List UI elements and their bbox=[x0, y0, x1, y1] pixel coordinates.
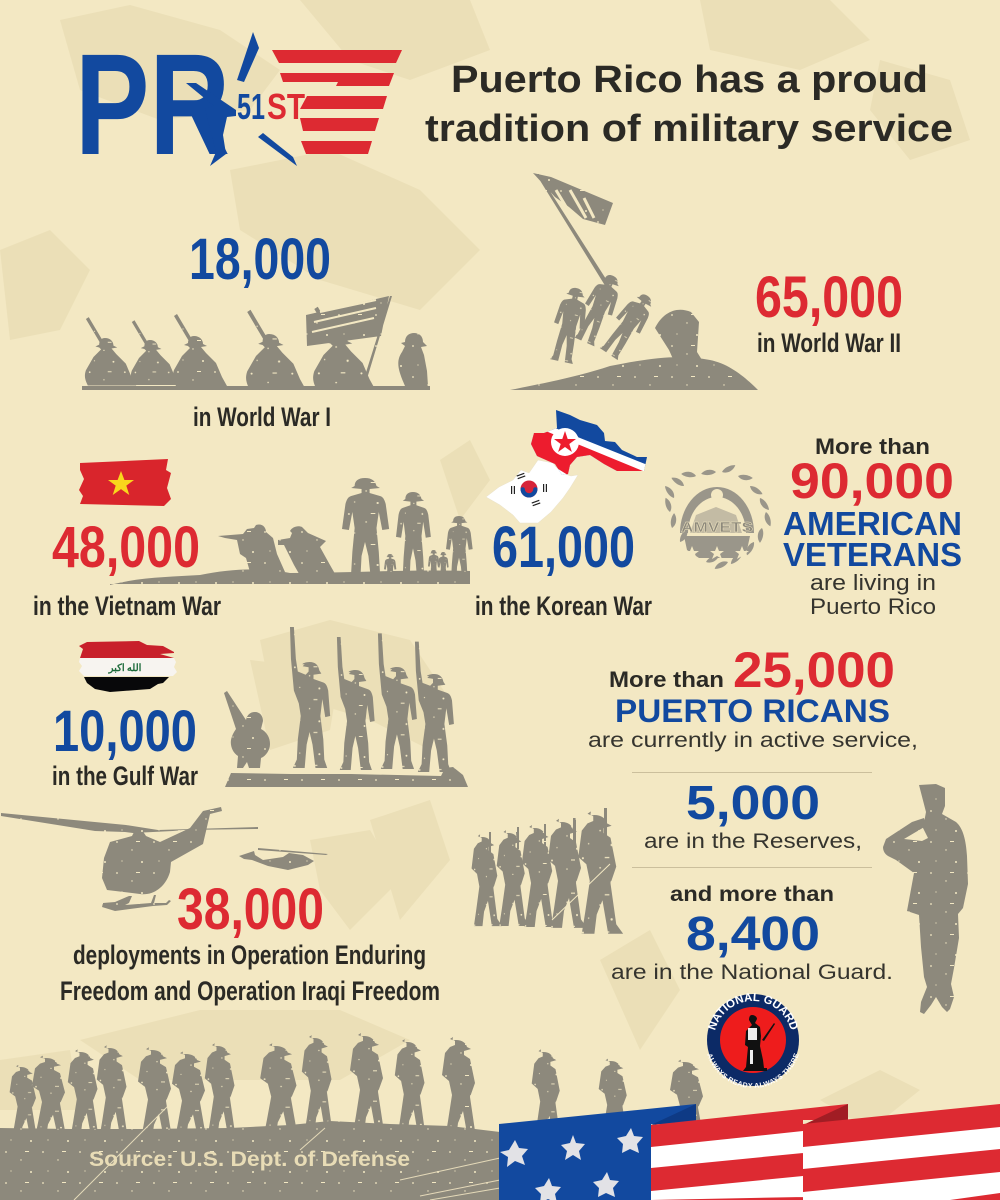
stat: Korean War bbox=[475, 515, 652, 621]
stat: Korean War: 61,000 bbox=[492, 515, 635, 580]
icon: National Guard seal: NATIONAL GUARD bbox=[708, 993, 798, 1030]
stat: 90,000 American veterans: AMERICAN bbox=[783, 505, 962, 542]
stat: 25,000 Puerto Ricans in active service: are currently in active service, bbox=[588, 729, 918, 752]
stat: 8,400 National Guard: and more than bbox=[670, 883, 834, 906]
icon: AMVETS seal: AMVETS bbox=[681, 519, 753, 536]
illustration: WWI soldiers and flag bbox=[82, 296, 430, 390]
stat: Vietnam War bbox=[33, 515, 221, 621]
stat: Vietnam War: in the Vietnam War bbox=[33, 591, 221, 621]
illustration: helicopters bbox=[1, 807, 328, 911]
stat: 90,000 American veterans: VETERANS bbox=[783, 536, 962, 573]
title: Puerto Rico has a proud bbox=[451, 59, 928, 101]
logo: PR 51st: PR bbox=[75, 24, 230, 185]
illustration: flag raising bbox=[510, 173, 758, 390]
stat: 38,000 deployments: deployments in Operation Enduring bbox=[73, 940, 426, 970]
stat: Vietnam War: 48,000 bbox=[52, 515, 200, 580]
icon: National Guard seal bbox=[707, 993, 799, 1088]
icon: National Guard seal: ALWAYS READY ALWAYS THERE bbox=[707, 1053, 799, 1088]
stat: 25,000 Puerto Ricans in active service: 25,000 bbox=[733, 642, 895, 698]
source note: Source: U.S. Dept. of Defense bbox=[89, 1148, 410, 1171]
stat: 90,000 American veterans: are living in bbox=[810, 570, 936, 595]
stat: 38,000 deployments: Freedom and Operation Iraqi Freedom bbox=[60, 976, 440, 1006]
stat: Gulf War: in the Gulf War bbox=[52, 761, 198, 791]
logo: PR 51st bbox=[75, 24, 427, 185]
stat: 8,400 National Guard bbox=[611, 883, 893, 984]
title bbox=[425, 59, 953, 150]
logo: PR 51st: 51 bbox=[237, 86, 265, 127]
stat: 25,000 Puerto Ricans in active service: More than bbox=[609, 667, 724, 692]
stat: 25,000 Puerto Ricans in active service: PUERTO RICANS bbox=[615, 693, 890, 729]
flag: Vietnam bbox=[79, 459, 171, 506]
stat: 38,000 deployments: 38,000 bbox=[177, 877, 324, 942]
map: Korean flags bbox=[486, 410, 647, 523]
stat: Gulf War: 10,000 bbox=[53, 699, 197, 764]
stat: World War II: in World War II bbox=[757, 328, 901, 358]
stat: 8,400 National Guard: are in the National Guard. bbox=[611, 961, 893, 984]
stat: 90,000 American veterans: 90,000 bbox=[790, 453, 954, 509]
illustration: marching troops and ground bbox=[0, 1033, 709, 1200]
stat: World War II bbox=[755, 265, 903, 358]
stat: World War II: 65,000 bbox=[755, 265, 903, 330]
stat: 25,000 Puerto Ricans in active service bbox=[588, 642, 918, 752]
stat: 90,000 American veterans: More than bbox=[815, 434, 930, 459]
stat: Korean War: in the Korean War bbox=[475, 591, 652, 621]
stat: 38,000 deployments bbox=[60, 877, 440, 1006]
stat: 5,000 Reserves: 5,000 bbox=[686, 777, 820, 830]
stat: World War I: in World War I bbox=[193, 402, 331, 432]
stat: Gulf War bbox=[52, 699, 198, 791]
logo: PR 51st: ST bbox=[267, 86, 305, 127]
stat: 5,000 Reserves bbox=[644, 777, 862, 853]
illustration: saluting soldier bbox=[883, 784, 968, 1014]
title: tradition of military service bbox=[425, 108, 953, 150]
stat: 5,000 Reserves: are in the Reserves, bbox=[644, 830, 862, 853]
stat: 90,000 American veterans: Puerto Rico bbox=[810, 594, 936, 619]
icon: AMVETS seal bbox=[665, 465, 771, 569]
flag: Iraq bbox=[79, 641, 177, 692]
illustration: marching soldiers bbox=[472, 808, 623, 934]
illustration: Vietnam War soldiers bbox=[110, 478, 473, 585]
stat: World War I: 18,000 bbox=[189, 227, 331, 292]
flag: Iraq: الله اكبر bbox=[108, 659, 142, 674]
stat: 90,000 American veterans bbox=[783, 434, 962, 619]
illustration: Gulf War soldiers bbox=[224, 627, 468, 787]
stat: World War I bbox=[189, 227, 331, 432]
banner: American flag bbox=[499, 1104, 1000, 1200]
stat: 8,400 National Guard: 8,400 bbox=[686, 908, 820, 961]
